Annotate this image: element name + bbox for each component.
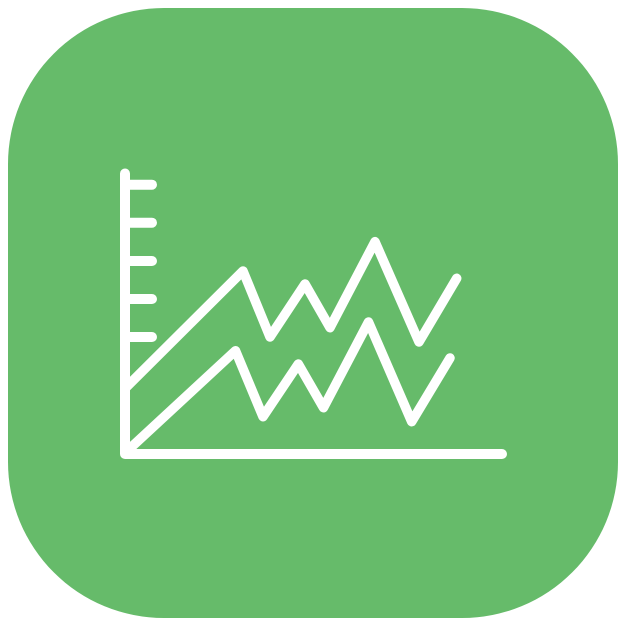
axes [125, 174, 502, 454]
axis tick marks [125, 185, 152, 337]
chart: axes and data lines [125, 174, 502, 454]
lower data line [125, 322, 450, 453]
upper data line [125, 242, 457, 388]
